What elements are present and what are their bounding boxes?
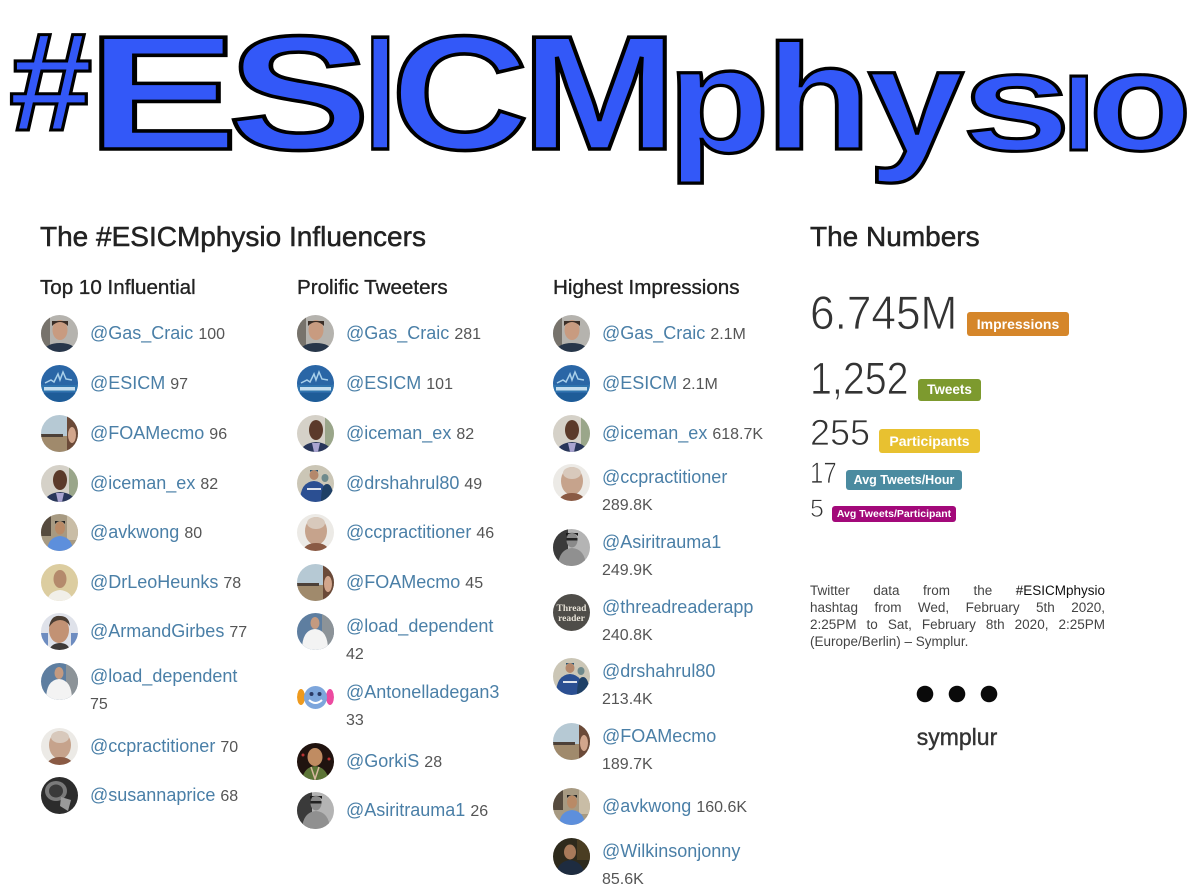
panel: highest impressions: 213.4K: [602, 691, 653, 708]
row: FOAMecmo: [553, 723, 716, 773]
logo text: symplur: symplur: [917, 724, 997, 750]
panel: highest impressions: 289.8K: [602, 497, 653, 514]
panel: prolific tweeters: 33: [346, 712, 364, 729]
panel: highest impressions: [553, 276, 763, 888]
row: ccpractitioner: [41, 728, 238, 765]
panel: prolific tweeters: [297, 276, 499, 829]
heading: influencers: The #ESICMphysio Influencers: [40, 221, 426, 252]
row: ESICM: [553, 365, 718, 402]
row: ESICM: @ESICM 97: [90, 373, 188, 393]
row: avkwong: [553, 788, 747, 825]
row: iceman_ex: @iceman_ex 82: [90, 473, 218, 493]
row: Asiritrauma1: [553, 529, 721, 579]
panel: the numbers: [810, 286, 1069, 523]
row: Wilkinsonjonny: [553, 838, 740, 888]
row: susannaprice: [41, 777, 238, 814]
badge: participants: Participants: [889, 433, 970, 449]
badge: impressions: Impressions: [977, 316, 1059, 332]
text block: data source: (Europe/Berlin) – Symplur.: [810, 634, 968, 649]
row: Antonelladegan3: [297, 682, 499, 729]
stat: avg tweets per participant value: 5: [810, 495, 824, 523]
row: ccpractitioner: @ccpractitioner: [602, 467, 727, 487]
row: load_dependent: [297, 613, 494, 663]
row: ccpractitioner: [297, 514, 494, 551]
title: #ESICMphysio: S: [228, 3, 370, 184]
panel: top 10 influential: 75: [90, 696, 108, 713]
badge: participants: [879, 429, 980, 453]
stat: impressions value: 6.745M: [810, 286, 957, 339]
badge: avg tweets per participant: Avg Tweets/Participant: [837, 508, 951, 520]
row: Asiritrauma1: @Asiritrauma1: [602, 532, 721, 552]
row: FOAMecmo: [297, 564, 483, 601]
row: iceman_ex: [41, 465, 218, 502]
text block: data source: 2:25PM to Sat, February 8th 2020, 2:25PM: [810, 617, 1105, 632]
stat: participants value: 255: [810, 412, 870, 453]
row: drshahrul80: @drshahrul80 49: [346, 473, 482, 493]
subheading: Top 10 Influential: [40, 276, 196, 299]
row: threadreaderapp: [553, 594, 753, 644]
row: FOAMecmo: @FOAMecmo 96: [90, 423, 227, 443]
row: ccpractitioner: @ccpractitioner 46: [346, 522, 494, 542]
text block: data source: hashtag from Wed, February 5th 2020,: [810, 600, 1105, 615]
row: DrLeoHeunks: @DrLeoHeunks 78: [90, 572, 241, 592]
subheading: Prolific Tweeters: [297, 276, 448, 299]
row: threadreaderapp: reader: [558, 614, 586, 624]
title: #ESICMphysio: y: [868, 17, 964, 185]
row: Asiritrauma1: @Asiritrauma1 26: [346, 800, 488, 820]
badge: avg tweets per hour: Avg Tweets/Hour: [854, 473, 954, 487]
panel: highest impressions: 249.9K: [602, 562, 653, 579]
title: #ESICMphysio: h: [766, 14, 871, 181]
badge: tweets: [918, 379, 981, 401]
title: #ESICMphysio: s: [962, 24, 1071, 180]
row: threadreaderapp: Thread: [557, 604, 587, 614]
row: load_dependent: @load_dependent: [346, 616, 493, 636]
row: Antonelladegan3: @Antonelladegan3: [346, 682, 499, 702]
text block: data source: [810, 583, 1105, 649]
row: ESICM: @ESICM 101: [346, 373, 453, 393]
row: drshahrul80: [297, 465, 482, 502]
row: Gas_Craic: [41, 315, 225, 352]
row: threadreaderapp: @threadreaderapp: [602, 597, 753, 617]
row: Asiritrauma1: [297, 792, 488, 829]
row: FOAMecmo: [41, 415, 227, 452]
title: #ESICMphysio: M: [522, 2, 677, 184]
row: iceman_ex: @iceman_ex 618.7K: [602, 423, 763, 443]
badge: avg tweets per hour: [846, 470, 962, 490]
row: ccpractitioner: [553, 464, 728, 514]
row: Gas_Craic: [297, 315, 481, 352]
row: iceman_ex: @iceman_ex 82: [346, 423, 474, 443]
row: ccpractitioner: @ccpractitioner 70: [90, 736, 238, 756]
row: ESICM: [297, 365, 453, 402]
panel: highest impressions: 85.6K: [602, 871, 644, 888]
title: #ESICMphysio: p: [668, 16, 770, 184]
row: ArmandGirbes: [41, 613, 247, 650]
row: avkwong: @avkwong 80: [90, 522, 202, 542]
title: #ESICMphysio: o: [1089, 23, 1192, 180]
row: GorkiS: [297, 743, 442, 780]
row: load_dependent: [41, 663, 238, 713]
title: #ESICMphysio: #: [9, 4, 92, 160]
row: load_dependent: @load_dependent: [90, 666, 237, 686]
panel: top 10 influential: [40, 276, 247, 814]
stat: tweets value: 1,252: [810, 353, 909, 404]
row: drshahrul80: [553, 658, 715, 708]
panel: prolific tweeters: 42: [346, 646, 364, 663]
row: FOAMecmo: @FOAMecmo: [602, 726, 716, 746]
badge: impressions: [967, 312, 1069, 336]
title: #ESICMphysio: I: [365, 3, 396, 184]
row: Gas_Craic: @Gas_Craic 2.1M: [602, 323, 746, 343]
panel: highest impressions: 189.7K: [602, 756, 653, 773]
title: #ESICMphysio: [9, 1, 1192, 185]
row: DrLeoHeunks: [41, 564, 241, 601]
row: Gas_Craic: @Gas_Craic 281: [346, 323, 481, 343]
stat: avg tweets per hour value: 17: [810, 457, 837, 490]
row: ArmandGirbes: @ArmandGirbes 77: [90, 621, 247, 641]
row: avkwong: [41, 514, 202, 551]
subheading: Highest Impressions: [553, 276, 740, 299]
row: FOAMecmo: @FOAMecmo 45: [346, 572, 483, 592]
row: ESICM: @ESICM 2.1M: [602, 373, 718, 393]
row: Wilkinsonjonny: @Wilkinsonjonny: [602, 841, 740, 861]
text block: data source: Twitter data from the #ESICMphysio: [810, 583, 1105, 598]
row: Gas_Craic: [553, 315, 746, 352]
row: iceman_ex: [297, 415, 474, 452]
title: #ESICMphysio: i: [1062, 24, 1095, 180]
heading: the numbers: The Numbers: [810, 221, 980, 252]
row: GorkiS: @GorkiS 28: [346, 751, 442, 771]
row: Gas_Craic: @Gas_Craic 100: [90, 323, 225, 343]
row: ESICM: [41, 365, 188, 402]
panel: highest impressions: 240.8K: [602, 627, 653, 644]
row: avkwong: @avkwong 160.6K: [602, 796, 747, 816]
icon: symplur dots: [916, 686, 998, 702]
row: susannaprice: @susannaprice 68: [90, 785, 238, 805]
badge: avg tweets per participant: [832, 506, 956, 522]
row: iceman_ex: [553, 415, 763, 452]
row: drshahrul80: @drshahrul80: [602, 661, 715, 681]
badge: tweets: Tweets: [927, 382, 972, 397]
title: #ESICMphysio: E: [86, 2, 239, 183]
title: #ESICMphysio: C: [391, 1, 529, 184]
